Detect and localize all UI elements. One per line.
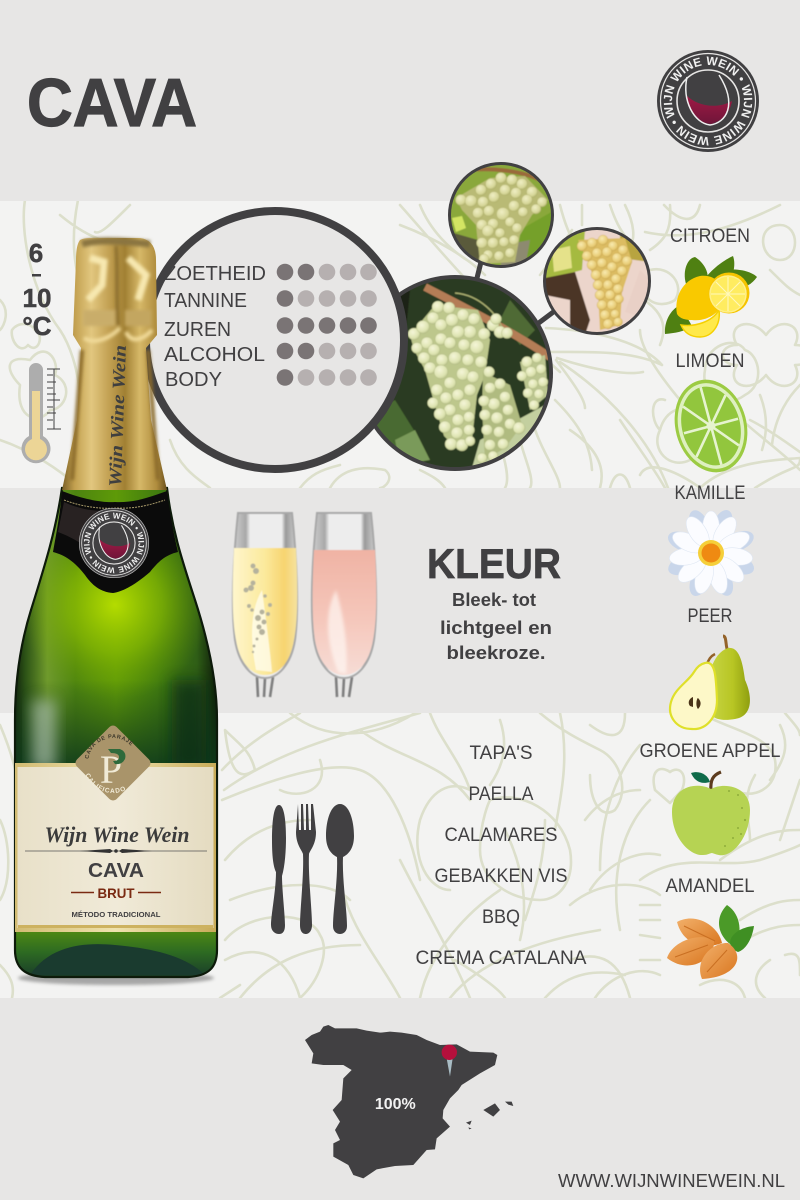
label diamond emblem — [76, 726, 150, 800]
panel: serving temperature — [21, 238, 61, 463]
icon: lemon — [665, 256, 757, 337]
label diamond emblem: CALIFICADO — [86, 774, 125, 793]
icon: daisy — [665, 507, 757, 599]
food pairing list: CREMA CATALANA — [416, 948, 587, 969]
photo: top grape cluster — [448, 162, 554, 268]
bottle black collar — [53, 491, 178, 593]
aroma labels — [640, 226, 780, 897]
icon: thermometer — [21, 363, 61, 463]
taste labels: ZUREN — [164, 319, 231, 341]
kleur description: bleekroze. — [446, 643, 546, 663]
food pairing list: TAPA'S — [470, 743, 532, 764]
panel: serving temperature: 6 — [29, 238, 43, 268]
title: CAVA — [27, 65, 197, 141]
taste labels: BODY — [165, 369, 222, 391]
map: Spain — [305, 1025, 513, 1178]
food pairing list: CALAMARES — [444, 825, 558, 846]
icon: green apple — [672, 772, 750, 855]
kleur description: lichtgeel en — [440, 618, 552, 638]
foil wrinkles — [72, 241, 158, 480]
taste labels: ALCOHOL — [164, 344, 265, 366]
photo: right golden grape cluster — [540, 225, 652, 337]
aroma labels: AMANDEL — [666, 876, 754, 897]
rating dots — [277, 264, 377, 386]
glass: white cava — [233, 513, 297, 697]
kleur description — [440, 590, 552, 663]
panel: serving temperature: °C — [22, 311, 52, 341]
connector: grape photos — [476, 262, 556, 328]
bottle label: BRUT — [98, 885, 135, 901]
icon: cutlery — [271, 804, 354, 934]
bottle label: Wijn Wine Wein — [44, 822, 190, 847]
taste labels — [164, 263, 266, 391]
logo: Wijn Wine Wein seal: WIJN WINE WEIN • WIJN WINE WEIN • — [664, 56, 752, 146]
panel: lower botanical band — [0, 713, 800, 998]
kleur description: Bleek- tot — [452, 590, 536, 610]
label diamond emblem: P — [100, 747, 122, 792]
bottle label: MÉTODO TRADICIONAL — [72, 910, 161, 919]
website url: WWW.WIJNWINEWEIN.NL — [558, 1171, 785, 1191]
photo: large white grape cluster — [374, 275, 553, 471]
food pairing list: GEBAKKEN VIS — [434, 866, 568, 887]
taste labels: TANNINE — [164, 290, 247, 312]
icon: almonds — [667, 905, 754, 979]
bottle seal: WIJN WINE WEIN • WIJN WINE WEIN • — [84, 512, 144, 574]
aroma labels: GROENE APPEL — [640, 741, 780, 762]
icon: lime — [665, 371, 757, 481]
label diamond emblem: CAVA DE PARAJE — [85, 734, 134, 758]
aroma labels: KAMILLE — [674, 483, 746, 504]
food pairing list — [416, 743, 587, 969]
kleur heading: KLEUR — [427, 540, 561, 587]
aroma labels: PEER — [688, 606, 732, 627]
bottle — [14, 234, 218, 987]
taste labels: ZOETHEID — [164, 263, 266, 285]
bottle label — [15, 726, 216, 932]
glass: rosé cava — [312, 513, 376, 697]
map percentage: 100% — [375, 1096, 416, 1113]
bottle foil neck — [62, 238, 167, 490]
aroma labels: CITROEN — [670, 226, 750, 247]
bottle label: CAVA — [88, 860, 144, 882]
icon: pear — [670, 636, 750, 729]
panel: serving temperature: 10 — [23, 283, 51, 313]
food pairing list: PAELLA — [468, 784, 534, 805]
food pairing list: BBQ — [482, 907, 520, 928]
map location pin — [442, 1045, 457, 1077]
bottle neck text: Wijn Wine Wein — [105, 345, 130, 487]
panel: upper botanical band — [0, 200, 800, 488]
aroma labels: LIMOEN — [676, 351, 744, 372]
panel: taste profile circle — [146, 160, 652, 480]
